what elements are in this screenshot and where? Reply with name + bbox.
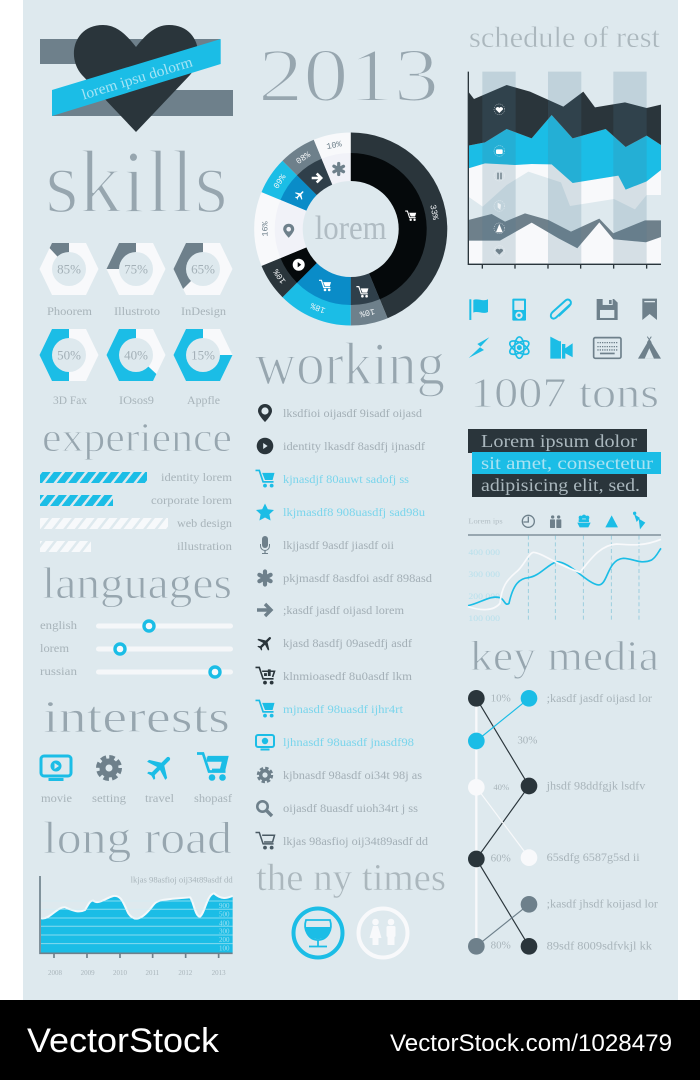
skill: InDesign 65% bbox=[174, 243, 232, 295]
chart: key media connections: 40% bbox=[493, 782, 509, 792]
title: working: working bbox=[255, 331, 445, 397]
list texts: lksdfioi oijasdf 9isadf oijasd bbox=[283, 406, 422, 420]
panel: experience bars: corporate lorem bbox=[151, 493, 233, 507]
icon: setting gear bbox=[98, 758, 120, 778]
donut outer ring bbox=[254, 132, 447, 326]
title: 1007 tons: 1007 tons bbox=[470, 371, 659, 417]
panel: interests icons bbox=[41, 748, 232, 805]
skill labels bbox=[47, 304, 226, 407]
panel: language sliders bbox=[40, 618, 233, 678]
list texts: pkjmasdf 8asdfoi asdf 898asd bbox=[283, 571, 432, 585]
icon: keyboard bbox=[594, 338, 621, 358]
donut percentages: 09% bbox=[272, 172, 289, 191]
chart: stacked schedule bbox=[468, 72, 661, 269]
icon: clock bbox=[522, 515, 534, 527]
chart: line chart bbox=[468, 512, 661, 623]
list texts: identity lkasdf 8asdfj ijnasdf bbox=[283, 439, 425, 453]
panel: experience bars bbox=[40, 470, 233, 553]
skill: 3D Fax 50%: 50% bbox=[57, 348, 81, 362]
icon: video camera bbox=[550, 337, 573, 359]
panel: language sliders: russian bbox=[40, 664, 77, 678]
panel: language sliders: english bbox=[40, 618, 77, 632]
chart: donut bbox=[254, 132, 447, 326]
list texts: lkjjasdf 9asdf jiasdf oii bbox=[283, 538, 395, 552]
title: 2013: 2013 bbox=[258, 34, 439, 118]
donut percentages: 10% bbox=[271, 266, 288, 285]
panel: interests icons: setting bbox=[92, 791, 126, 805]
chart: long road area bbox=[40, 875, 233, 977]
callout: lorem ipsum block: adipisicing elit, sed. bbox=[481, 475, 640, 495]
chart: key media connections: ;kasdf jasdf oijasd lor bbox=[547, 691, 652, 705]
icon: people bbox=[550, 515, 561, 528]
icon: search bbox=[257, 801, 272, 816]
chart: long road area: 2012 bbox=[178, 969, 193, 977]
chart: long road area: 900 bbox=[219, 902, 230, 910]
skill labels: InDesign bbox=[181, 304, 226, 318]
chart: long road area: 300 bbox=[219, 928, 230, 936]
chart: line chart: Lorem ips bbox=[468, 518, 503, 526]
icon: pin bbox=[258, 404, 272, 422]
icon: star bbox=[256, 504, 274, 520]
list texts: kjnasdjf 80auwt sadofj ss bbox=[283, 472, 409, 486]
chart: line chart: 200 000 bbox=[468, 591, 500, 601]
skill: Phoorem 85% bbox=[40, 243, 98, 295]
chart: long road area: 400 bbox=[219, 919, 230, 927]
list texts: ;kasdf jasdf oijasd lorem bbox=[283, 603, 405, 617]
skill: InDesign 65%: 65% bbox=[191, 262, 215, 276]
title: long road: long road bbox=[43, 812, 232, 863]
icon: boat bbox=[577, 515, 591, 527]
panel: language sliders: lorem bbox=[40, 641, 70, 655]
icon: people badge bbox=[358, 908, 408, 958]
chart: long road area: 200 bbox=[219, 936, 230, 944]
icon: bookmark bbox=[642, 299, 657, 320]
title: languages: languages bbox=[42, 559, 232, 608]
chart: key media connections: 60% bbox=[491, 852, 511, 864]
title: interests: interests bbox=[43, 691, 230, 742]
skill labels: 3D Fax bbox=[53, 393, 87, 407]
skill: Illustroto 75%: 75% bbox=[124, 262, 148, 276]
icon: ipod bbox=[512, 299, 526, 321]
chart: long road area: 2010 bbox=[113, 969, 127, 977]
vertical highlight columns bbox=[482, 72, 647, 263]
donut percentages bbox=[261, 139, 440, 319]
icon: gear bbox=[258, 768, 272, 782]
callout: lorem ipsum block: Lorem ipsum dolor bbox=[481, 431, 637, 451]
title: experience: experience bbox=[42, 414, 232, 460]
callout: lorem ipsum block: sit amet, consectetur bbox=[481, 453, 653, 473]
list texts: klnmioasedf 8u0asdf lkm bbox=[283, 669, 413, 683]
list texts bbox=[283, 406, 432, 848]
icon: shop cart bbox=[197, 754, 227, 781]
chart: key media connections: 89sdf 8009sdfvkjl kk bbox=[547, 939, 652, 953]
footer banner: VectorStock.com/1028479 bbox=[390, 1030, 672, 1057]
icon: floppy bbox=[597, 299, 618, 320]
skill: Phoorem 85%: 85% bbox=[57, 262, 81, 276]
chart: key media connections: jhsdf 98ddfgjk lsdfv bbox=[546, 779, 645, 793]
icon: cyan cart bbox=[256, 470, 274, 488]
title: the ny times: the ny times bbox=[256, 857, 446, 899]
icon: asterisk bbox=[259, 572, 271, 584]
icon: plane bbox=[254, 632, 276, 654]
list texts: mjnasdf 98uasdf ijhr4rt bbox=[283, 702, 404, 716]
icon: travel plane bbox=[141, 748, 179, 786]
skill: Appfle 15% bbox=[174, 329, 232, 381]
icon: outline cart bbox=[256, 832, 274, 850]
chart: key media connections bbox=[468, 690, 658, 955]
icon: tent bbox=[638, 337, 661, 359]
donut centre label: lorem bbox=[315, 210, 387, 247]
icon: tent bbox=[605, 515, 618, 527]
grey band bbox=[468, 213, 661, 248]
bottom white band bbox=[468, 222, 661, 263]
skill labels: IOsos9 bbox=[119, 393, 154, 407]
donut icons bbox=[283, 164, 416, 298]
title: schedule of rest: schedule of rest bbox=[469, 21, 661, 54]
donut percentages: 16% bbox=[261, 220, 271, 237]
skill: 3D Fax 50% bbox=[40, 329, 98, 381]
icon: movie tv bbox=[41, 756, 71, 781]
panel: experience bars: identity lorem bbox=[161, 470, 233, 484]
skill: IOsos9 40% bbox=[106, 329, 166, 381]
icon: flag bbox=[469, 299, 488, 320]
skill: IOsos9 40%: 40% bbox=[124, 348, 148, 362]
heart with ribbon bbox=[40, 25, 233, 132]
panel: working list bbox=[254, 404, 432, 850]
chart: long road area: 2011 bbox=[145, 969, 160, 977]
chart: long road area: lkjas 98asfioj oij34t89asdf dd bbox=[131, 875, 233, 884]
icon: atom bbox=[508, 337, 531, 358]
chart: long road area: 2009 bbox=[81, 969, 95, 977]
panel: interests icons: shopasf bbox=[194, 791, 232, 805]
panel: experience bars: illustration bbox=[177, 539, 232, 553]
chart axes bbox=[468, 72, 661, 264]
icon: wine glass badge bbox=[294, 908, 342, 958]
donut percentages: 33% bbox=[427, 204, 440, 222]
chart: long road area: 500 bbox=[219, 911, 230, 919]
icon: footprints bbox=[633, 512, 645, 529]
icon: basket cart bbox=[256, 667, 274, 685]
icon: play bbox=[257, 438, 273, 454]
panel: interests icons: movie bbox=[41, 791, 72, 805]
donut percentages: 10% bbox=[326, 139, 343, 152]
heart with ribbon: lorem ipsu dolorm bbox=[80, 54, 195, 103]
chart: line chart: 300 000 bbox=[468, 569, 500, 579]
chart: long road area: 2008 bbox=[48, 969, 62, 977]
skill labels: Illustroto bbox=[114, 304, 160, 318]
icon: microphone bbox=[260, 536, 270, 554]
skill labels: Appfle bbox=[187, 393, 220, 407]
icon: cyan cart 2 bbox=[256, 700, 274, 718]
skill: Illustroto 75% bbox=[106, 243, 166, 295]
donut percentages: 18% bbox=[308, 300, 327, 315]
donut percentages: 08% bbox=[294, 149, 313, 167]
chart: long road area: 2013 bbox=[212, 969, 226, 977]
icon: paperclip bbox=[551, 300, 571, 319]
chart: key media connections: 30% bbox=[517, 735, 537, 747]
icon: lightning bbox=[469, 337, 489, 358]
title: skills: skills bbox=[45, 133, 228, 232]
chart markers bbox=[494, 104, 505, 256]
chart: key media connections: 80% bbox=[491, 940, 511, 952]
list texts: lkjmasdf8 908uasdfj sad98u bbox=[283, 505, 425, 519]
white band bbox=[468, 163, 661, 209]
skill labels: Phoorem bbox=[47, 304, 93, 318]
title: key media: key media bbox=[470, 634, 659, 680]
panel: icon grid bbox=[469, 299, 661, 359]
chart: key media connections: 65sdfg 6587g5sd ii bbox=[547, 850, 640, 864]
chart: line chart: 400 000 bbox=[468, 547, 500, 557]
icon: tv bbox=[256, 735, 274, 750]
footer banner: VectorStock bbox=[27, 1022, 220, 1060]
donut inner ring bbox=[275, 153, 427, 305]
list texts: oijasdf 8uasdf uioh34rt j ss bbox=[283, 801, 418, 815]
footer banner bbox=[0, 1000, 700, 1080]
cyan band bbox=[468, 115, 661, 190]
list texts: ljhnasdf 98uasdf jnasdf98 bbox=[283, 735, 414, 749]
chart: long road area: 100 bbox=[219, 944, 230, 952]
panel: skills hexagons bbox=[40, 243, 232, 406]
list texts: kjbnasdf 98asdf oi34t 98j as bbox=[283, 768, 422, 782]
chart: line chart: 100 000 bbox=[468, 613, 500, 623]
list texts: lkjas 98asfioj oij34t89asdf dd bbox=[283, 834, 428, 848]
callout: lorem ipsum block bbox=[468, 429, 661, 497]
skill: Appfle 15%: 15% bbox=[191, 348, 215, 362]
dark band bbox=[468, 85, 661, 147]
icon: arrow bbox=[257, 604, 271, 616]
chart: key media connections: ;kasdf jhsdf koijasd lor bbox=[547, 897, 658, 911]
list texts: kjasd 8asdfj 09asedfj asdf bbox=[283, 636, 412, 650]
panel: experience bars: web design bbox=[177, 516, 232, 530]
panel: interests icons: travel bbox=[145, 791, 175, 805]
donut percentages: 10% bbox=[358, 306, 376, 319]
chart: key media connections: 10% bbox=[491, 692, 511, 704]
